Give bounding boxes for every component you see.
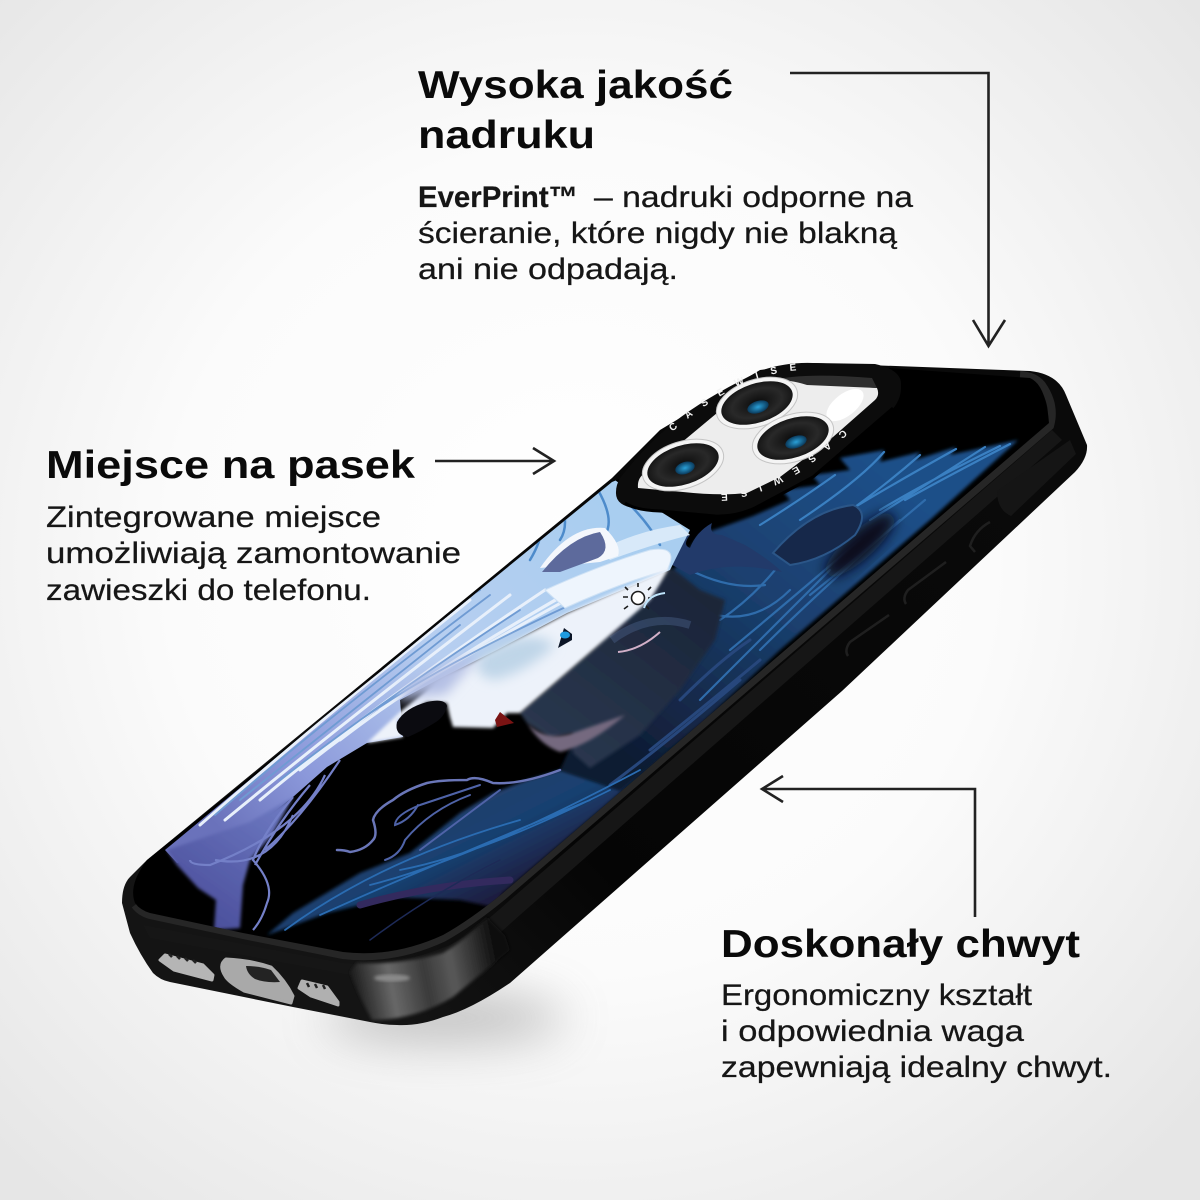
case body bbox=[122, 363, 1087, 1025]
brand text bottom: CASEWISE bbox=[721, 430, 846, 501]
white lion eye bbox=[558, 628, 572, 648]
body text: i odpowiednia waga bbox=[721, 1015, 1025, 1048]
phone shadow bbox=[325, 994, 565, 1042]
horn tuft bbox=[667, 523, 782, 575]
dark lion mane bbox=[560, 440, 1018, 790]
side shade bbox=[143, 430, 1062, 985]
black screen bbox=[133, 368, 1049, 954]
arrow: to print bbox=[790, 73, 1005, 346]
moon symbol bbox=[644, 593, 665, 608]
white lion mouth bbox=[396, 701, 447, 737]
callout: grip bbox=[721, 923, 1112, 1084]
bottom corner highlight bbox=[350, 917, 510, 1020]
white lion ear bbox=[540, 528, 619, 572]
callout: strap slot bbox=[46, 444, 461, 607]
sun symbol bbox=[623, 583, 653, 609]
arrow: to grip bbox=[762, 776, 975, 917]
white lion mane bbox=[165, 478, 690, 863]
brand text top: CASEWISE bbox=[670, 364, 796, 430]
highlight spot bbox=[374, 974, 410, 982]
side buttons bbox=[846, 440, 1076, 656]
speaker right bbox=[299, 981, 338, 1005]
heading: Wysoka jakość bbox=[418, 64, 733, 107]
body text: Zintegrowane miejsce bbox=[46, 501, 381, 534]
camera bump bbox=[616, 362, 901, 514]
arrow: to strap slot bbox=[435, 448, 554, 474]
dark lion ear bbox=[773, 505, 862, 565]
white lion face bbox=[367, 567, 670, 743]
heading: Doskonały chwyt bbox=[721, 923, 1080, 966]
body text bbox=[46, 501, 461, 607]
bezel bbox=[135, 375, 1052, 956]
camera well bbox=[638, 379, 878, 494]
body text: Ergonomiczny kształt bbox=[721, 979, 1032, 1012]
speaker left bbox=[160, 954, 213, 980]
dark lion face bbox=[520, 568, 725, 768]
body text bbox=[418, 181, 914, 286]
white lion nose bbox=[495, 712, 514, 727]
heading: nadruku bbox=[418, 114, 595, 157]
body text: zawieszki do telefonu. bbox=[46, 574, 371, 607]
heading bbox=[418, 64, 733, 157]
body text: ścieranie, które nigdy nie blakną bbox=[418, 217, 898, 250]
lens top bbox=[710, 368, 804, 438]
screen artwork: lions bbox=[133, 368, 1049, 954]
lens right bbox=[746, 403, 840, 473]
body text: – nadruki odporne na bbox=[594, 181, 914, 214]
callout: print quality bbox=[418, 64, 914, 286]
white lion hanging mane bbox=[167, 760, 340, 930]
heading: Miejsce na pasek bbox=[46, 444, 415, 487]
body text bbox=[721, 979, 1112, 1084]
body text: EverPrint™ bbox=[418, 181, 578, 214]
body text: umożliwiają zamontowanie bbox=[46, 537, 461, 570]
lens left bbox=[636, 430, 730, 500]
body text: ani nie odpadają. bbox=[418, 253, 678, 286]
lower flowing hair bbox=[267, 742, 678, 941]
body text: zapewniają idealny chwyt. bbox=[721, 1051, 1112, 1084]
USB port bbox=[222, 959, 293, 1003]
phone case bbox=[122, 363, 1087, 1025]
camera frame bbox=[616, 363, 901, 516]
